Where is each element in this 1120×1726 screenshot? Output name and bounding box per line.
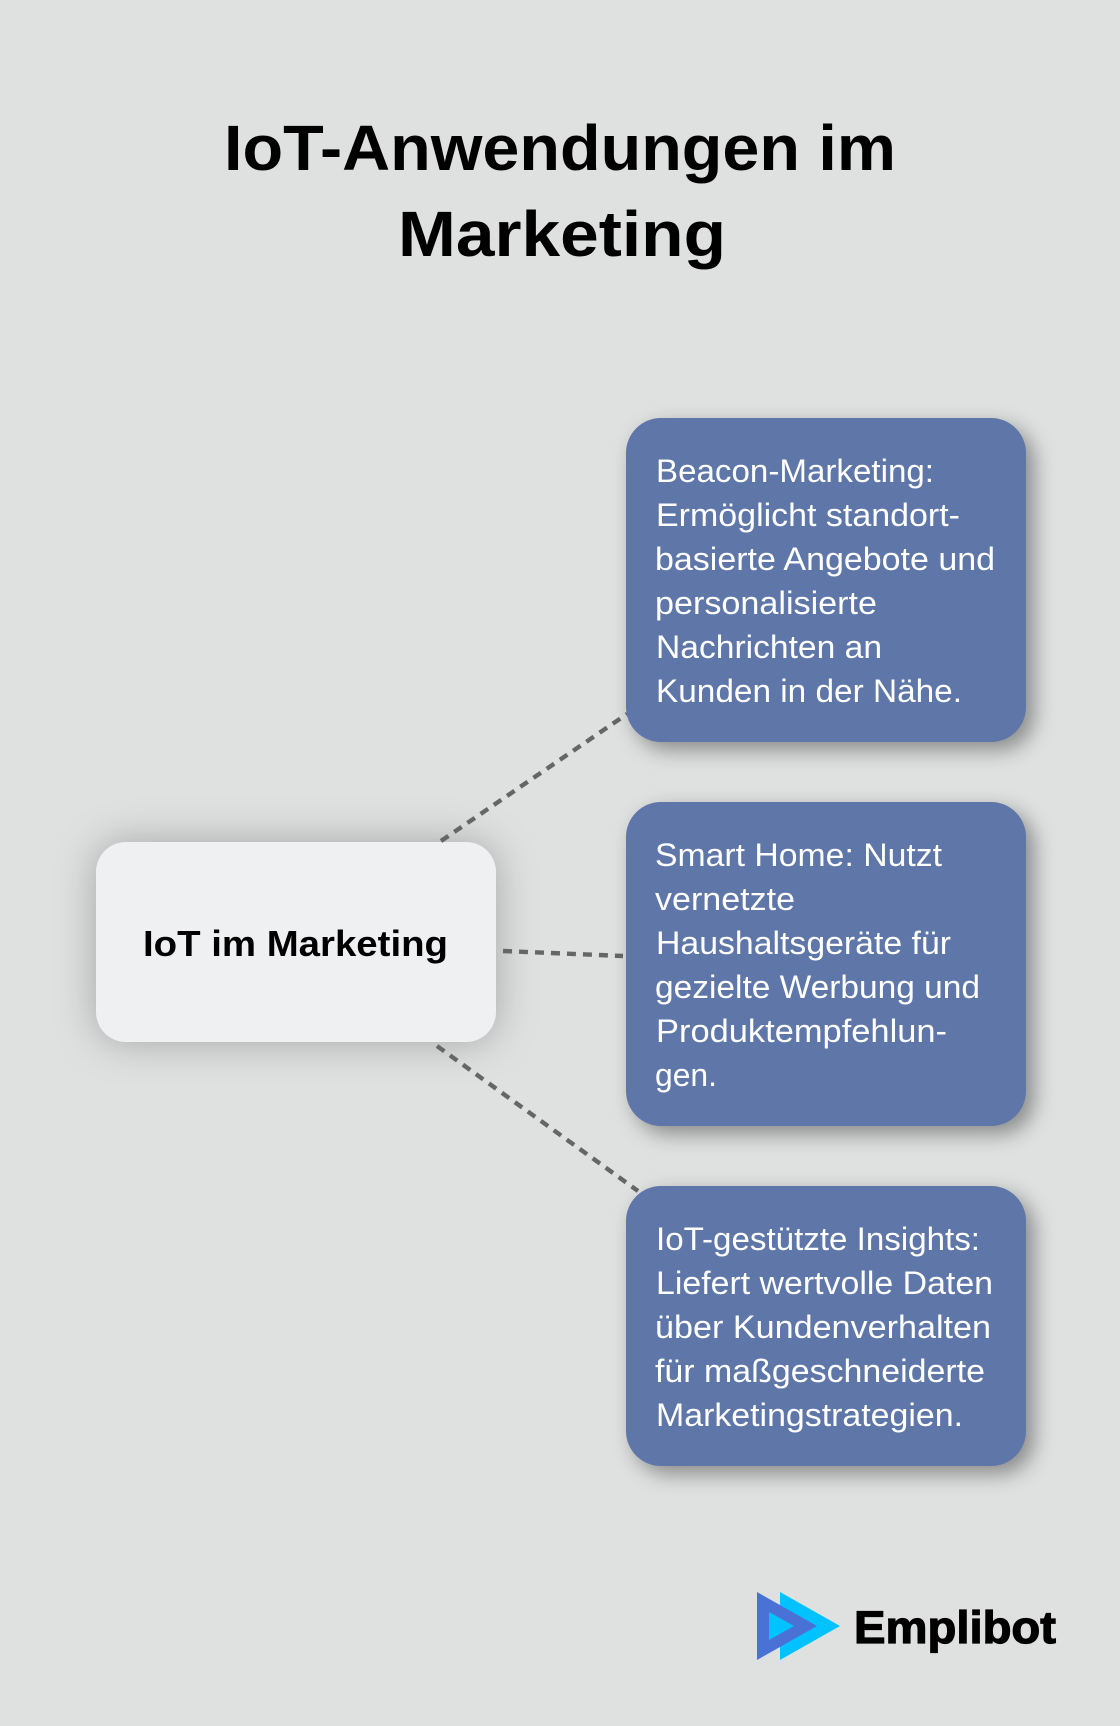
logo: Emplibot [757, 1592, 1056, 1660]
panel: Beacon-Marketing: personalisierte [655, 585, 877, 621]
title [224, 112, 896, 270]
connector: central node to IoT-gestützte Insights [437, 1046, 638, 1191]
panel: Smart Home: vernetzte [655, 881, 795, 917]
panel: central node IoT im Marketing: IoT im Marketing [143, 923, 448, 964]
panel: Smart Home: Smart Home: Nutzt [655, 837, 942, 873]
icon: play triangles [757, 1592, 840, 1660]
panel: IoT-gestützte Insights: Marketingstrategien. [656, 1397, 963, 1433]
panel: IoT-gestützte Insights: Liefert wertvolle Daten [656, 1265, 993, 1301]
logo wordmark: Emplibot [854, 1602, 1056, 1653]
panel: central node IoT im Marketing [96, 842, 496, 1042]
panel: Smart Home: gen. [655, 1057, 717, 1093]
panel: Beacon-Marketing: Nachrichten an [656, 629, 882, 665]
panel: IoT-gestützte Insights: über Kundenverhalten [655, 1309, 991, 1345]
connector: central node to Beacon-Marketing [441, 714, 627, 841]
panel: Beacon-Marketing: Beacon-Marketing: [656, 453, 934, 489]
panel: Beacon-Marketing: basierte Angebote und [655, 541, 995, 577]
panel: IoT-gestützte Insights: IoT-gestützte Insights: [656, 1221, 980, 1257]
panel: Smart Home: gezielte Werbung und [655, 969, 980, 1005]
panel: IoT-gestützte Insights: für maßgeschneiderte [655, 1353, 985, 1389]
title: IoT-Anwendungen im [224, 112, 896, 184]
title: Marketing [398, 198, 726, 270]
connector: central node to Smart Home [503, 951, 623, 956]
panel: Smart Home: Produktempfehlun- [656, 1013, 947, 1049]
panel: Smart Home: Haushaltsgeräte für [656, 925, 951, 961]
panel: IoT-gestützte Insights [626, 1186, 1026, 1466]
panel: Smart Home [626, 802, 1026, 1126]
panel: Beacon-Marketing: Kunden in der Nähe. [656, 673, 962, 709]
panel: Beacon-Marketing: Ermöglicht standort- [656, 497, 960, 533]
panel: Beacon-Marketing [626, 418, 1026, 742]
